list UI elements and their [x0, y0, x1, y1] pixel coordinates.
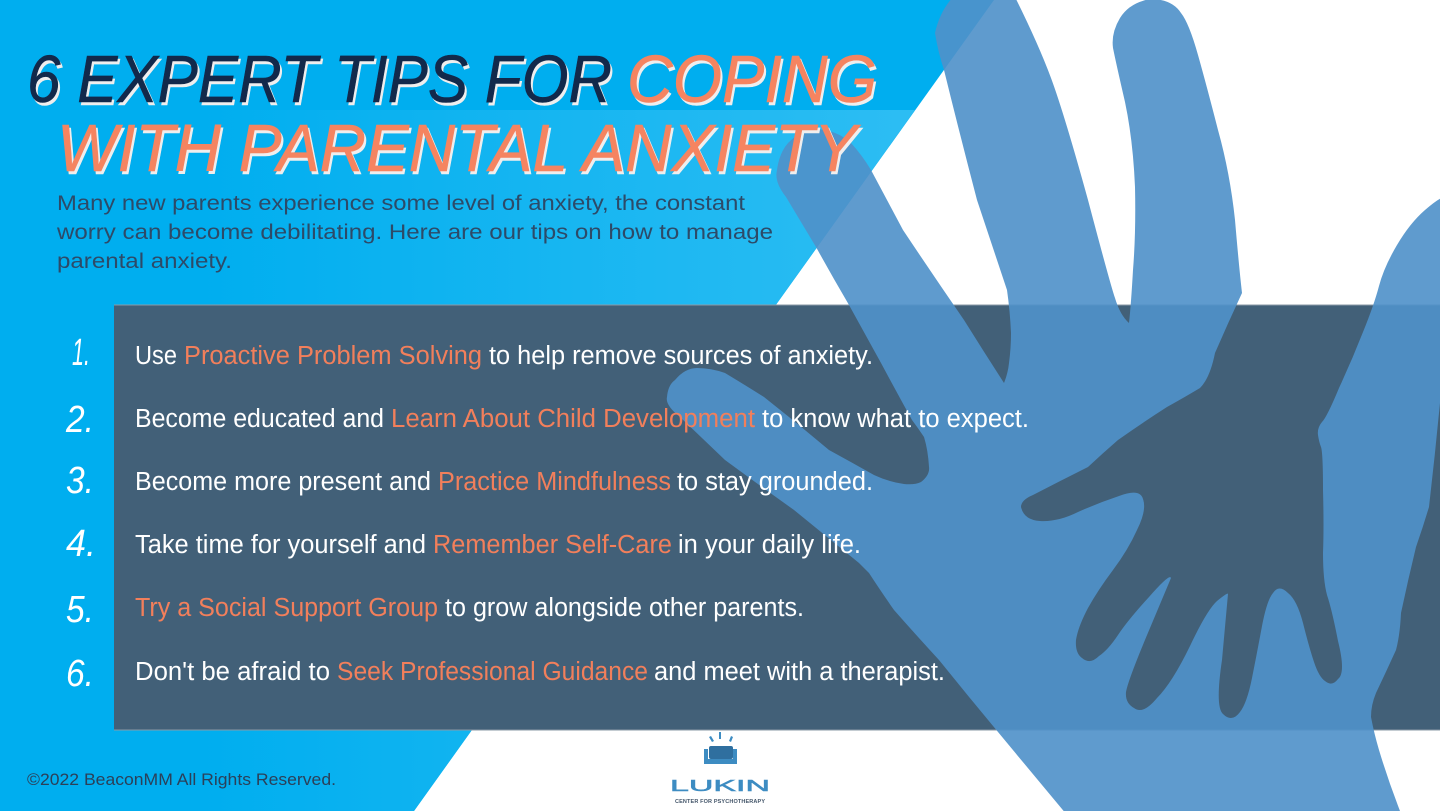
- tip 2: Become educated and: [135, 405, 384, 433]
- tip 3: [66, 460, 873, 502]
- tip 3: Practice Mindfulness: [438, 468, 671, 496]
- tip 1: [72, 332, 873, 374]
- wordmark: LUKIN: [670, 778, 770, 795]
- tip 6: [66, 653, 945, 695]
- title: COPING: [627, 42, 877, 117]
- tip 6: Seek Professional Guidance: [337, 658, 648, 686]
- tip 2: [65, 399, 1029, 441]
- intro paragraph: worry can become debilitating. Here are our tips on how to manage: [56, 221, 773, 244]
- tip 2: 2.: [65, 399, 94, 441]
- copyright footer: ©2022 BeaconMM All Rights Reserved.: [27, 770, 336, 789]
- intro paragraph: Many new parents experience some level of anxiety, the constant: [57, 192, 745, 215]
- panel: tips background: [114, 304, 1440, 730]
- tip 1: to help remove sources of anxiety.: [489, 342, 873, 370]
- tip 4: [66, 523, 861, 565]
- tip 6: 6.: [66, 653, 94, 695]
- title: [27, 42, 877, 186]
- illustration: overlapping adult and child hands: [667, 0, 1440, 811]
- tip 4: Take time for yourself and: [135, 531, 426, 559]
- title: 6 EXPERT TIPS FOR: [27, 42, 612, 117]
- tip 4: Remember Self-Care: [433, 531, 672, 559]
- tip 6: Don't be afraid to: [135, 658, 330, 686]
- tip 3: Become more present and: [135, 468, 431, 496]
- tip 5: 5.: [66, 589, 94, 631]
- logo: Lukin Center for Psychotherapy: [670, 732, 770, 805]
- title: WITH PARENTAL ANXIETY: [57, 111, 861, 186]
- background: blue diagonal shape: [0, 0, 994, 811]
- tip 4: in your daily life.: [678, 531, 861, 559]
- tip 1: Use: [135, 342, 177, 370]
- tip 1: Proactive Problem Solving: [184, 342, 482, 370]
- tip 5: Try a Social Support Group: [135, 594, 438, 622]
- tip 1: 1.: [72, 332, 90, 374]
- tip 3: to stay grounded.: [677, 468, 873, 496]
- tip 5: to grow alongside other parents.: [445, 594, 804, 622]
- tip 4: 4.: [66, 523, 96, 565]
- intro paragraph: parental anxiety.: [57, 250, 232, 273]
- tip 6: and meet with a therapist.: [654, 658, 945, 686]
- tip 3: 3.: [66, 460, 94, 502]
- tip 2: to know what to expect.: [762, 405, 1029, 433]
- tip 5: [66, 589, 804, 631]
- icon: couch with rays: [704, 732, 737, 764]
- tagline: CENTER FOR PSYCHOTHERAPY: [675, 799, 765, 805]
- tip 2: Learn About Child Development: [391, 405, 755, 433]
- intro paragraph: [56, 192, 773, 273]
